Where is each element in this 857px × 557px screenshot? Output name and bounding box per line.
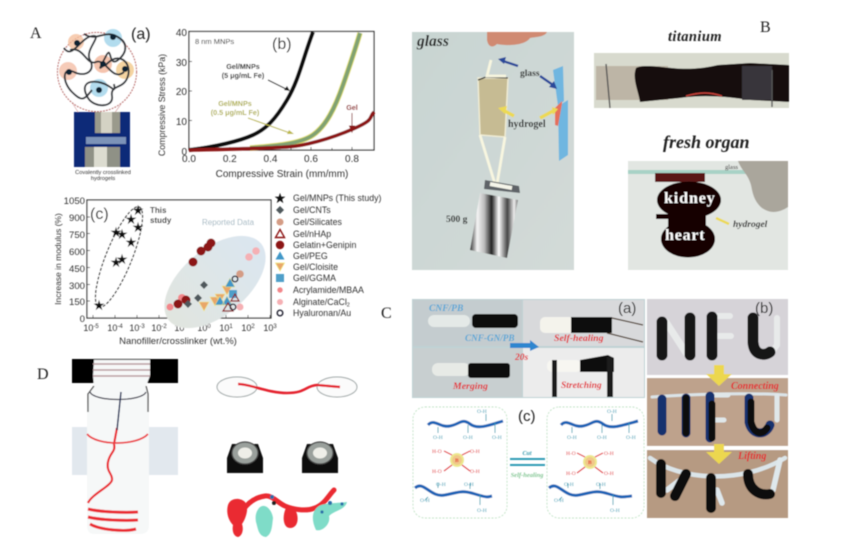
stars: ★ bbox=[110, 254, 122, 270]
arrow bbox=[716, 218, 729, 224]
x axis ticks: 0.4 bbox=[264, 154, 278, 165]
pale backdrop band bbox=[72, 427, 178, 475]
legend labels: Gel/nHAp bbox=[293, 229, 331, 239]
legend labels: Gel/PEG bbox=[293, 251, 328, 261]
legend labels: Gel/CNTs bbox=[293, 205, 331, 215]
annotation: Gel/MNPs 0.5 bbox=[211, 99, 260, 117]
label glass: glass bbox=[416, 33, 449, 50]
annotation: Gel/MNPs 0.5: Gel/MNPs bbox=[218, 99, 252, 108]
right dashed box bbox=[547, 407, 644, 518]
heading titanium: titanium bbox=[668, 29, 722, 45]
x axis ticks: 0.0 bbox=[182, 154, 196, 165]
panel: D printed red and teal shape bbox=[227, 490, 347, 537]
right molecule: O-H bbox=[610, 508, 620, 514]
panel: D vial photo bbox=[72, 359, 178, 534]
zoom lines bbox=[73, 104, 121, 128]
label hydrogel: hydrogel bbox=[733, 220, 768, 230]
legend: chart c bbox=[274, 190, 382, 318]
label 500 g: 500 g bbox=[446, 215, 468, 225]
label D: D bbox=[37, 366, 49, 383]
label Lifting: Lifting bbox=[737, 451, 766, 462]
legend labels: Gel/Silicates bbox=[293, 217, 342, 227]
right molecule: H-O bbox=[566, 471, 576, 477]
x ticks: 3 bbox=[273, 324, 277, 330]
left molecule: H-O bbox=[432, 469, 442, 475]
label glass small: glass bbox=[520, 69, 540, 79]
arrows bbox=[706, 365, 732, 386]
legend labels: Alginate/CaCl bbox=[293, 297, 347, 307]
label CNF/PB: CNF/PB bbox=[429, 304, 463, 314]
blue glass schematic bbox=[553, 66, 568, 161]
stars: ★ bbox=[110, 224, 122, 240]
left molecule: O-H bbox=[477, 409, 487, 415]
legend labels: Gel/Cloisite bbox=[293, 262, 338, 272]
left molecule: O-H bbox=[470, 449, 480, 455]
label (b): (b) bbox=[272, 36, 292, 53]
x ticks: -1 bbox=[184, 324, 190, 330]
right molecule: O-H bbox=[604, 471, 614, 477]
annotation: This study: study bbox=[150, 216, 172, 225]
caption: Covalently crosslinked bbox=[75, 170, 131, 176]
label Cut: Cut bbox=[522, 451, 532, 457]
label Connecting: Connecting bbox=[731, 381, 779, 392]
x ticks: -4 bbox=[117, 324, 123, 330]
stars bbox=[93, 202, 144, 313]
left molecule: O-H bbox=[433, 435, 443, 441]
stars: ★ bbox=[125, 211, 137, 227]
y axis ticks: 20 bbox=[176, 87, 187, 98]
x axis ticks: 0.2 bbox=[223, 154, 237, 165]
arrow bbox=[268, 80, 288, 90]
weight bbox=[470, 180, 520, 258]
stars: ★ bbox=[132, 219, 144, 235]
label B: B bbox=[760, 19, 771, 36]
series: Gel/MNPs 5 bbox=[189, 32, 313, 150]
x axis ticks: 0.6 bbox=[304, 154, 318, 165]
label (b): (b) bbox=[755, 300, 773, 317]
y ticks: 900 bbox=[69, 213, 85, 224]
series: Gel/MNPs 0.5 bbox=[250, 33, 360, 148]
label (a): (a) bbox=[131, 26, 151, 43]
right molecule: H-O bbox=[566, 451, 576, 457]
annotation: Gel: Gel bbox=[346, 103, 358, 112]
right molecule: O-H bbox=[567, 435, 577, 441]
x title: Nanofiller/crosslinker (wt.%) bbox=[119, 336, 237, 347]
label (a): (a) bbox=[618, 300, 636, 317]
y ticks bbox=[64, 196, 85, 325]
legend labels: Gel/MNPs (This study) bbox=[293, 193, 382, 203]
stars: ★ bbox=[116, 251, 128, 267]
label CNF-GN/PB: CNF-GN/PB bbox=[465, 333, 515, 343]
vial bbox=[87, 360, 150, 534]
label Stretching: Stretching bbox=[561, 381, 602, 391]
photo: hydrogel under compression bbox=[74, 112, 130, 167]
x ticks bbox=[83, 323, 277, 333]
label (c): (c) bbox=[518, 408, 536, 425]
annotation: Gel/MNPs 0.5: (0.5 μg/mL Fe) bbox=[211, 108, 260, 117]
reported data ellipse bbox=[148, 218, 282, 346]
photo: fresh organ bbox=[628, 161, 788, 270]
x ticks: 2 bbox=[251, 324, 255, 330]
x ticks: 10 bbox=[174, 323, 184, 333]
panel: A mechanical data bbox=[30, 25, 151, 182]
y axis ticks: 30 bbox=[176, 58, 187, 69]
label kidney: kidney bbox=[664, 190, 716, 207]
x axis ticks: 0.8 bbox=[345, 154, 359, 165]
y axis ticks bbox=[176, 28, 187, 158]
heading fresh organ: fresh organ bbox=[663, 132, 750, 152]
hydrogel thread bbox=[88, 428, 117, 503]
NFU top bbox=[662, 316, 777, 356]
y axis ticks: 10 bbox=[176, 117, 187, 128]
label Merging: Merging bbox=[452, 381, 488, 392]
stars: ★ bbox=[93, 297, 105, 313]
label hydrogel: hydrogel bbox=[508, 119, 546, 130]
x ticks: -5 bbox=[93, 324, 99, 330]
right molecule: O-H bbox=[604, 451, 614, 457]
left molecule: O-H bbox=[464, 482, 474, 488]
chart: modulus vs filler (c) bbox=[53, 196, 282, 347]
glass plate with hydrogel bbox=[478, 78, 508, 137]
right molecule: O-H bbox=[626, 435, 636, 441]
x axis ticks bbox=[182, 154, 359, 165]
right molecule: O-H bbox=[596, 482, 606, 488]
y ticks: 300 bbox=[69, 281, 85, 292]
left molecule: O-H bbox=[436, 482, 446, 488]
label heart: heart bbox=[665, 227, 705, 244]
label (c): (c) bbox=[90, 206, 109, 223]
panel: C(b) NFU letters bbox=[647, 299, 788, 518]
left molecule: H-O bbox=[432, 449, 442, 455]
annotation: Gel/MNPs 5: (5 μg/mL Fe) bbox=[222, 71, 265, 80]
label Self-healing: Self-healing bbox=[511, 472, 544, 479]
vial bases bbox=[227, 442, 338, 473]
panel: C(a) self healing photos bbox=[412, 299, 645, 398]
label Self-healing: Self-healing bbox=[554, 333, 604, 344]
legend symbols: ★ bbox=[274, 190, 286, 206]
label C: C bbox=[381, 305, 392, 322]
right molecule: B bbox=[588, 460, 592, 466]
legend labels: Hyaluronan/Au bbox=[293, 308, 351, 318]
y ticks: 1050 bbox=[64, 196, 85, 207]
y ticks: 600 bbox=[69, 247, 85, 258]
arrow bbox=[350, 113, 354, 132]
arrow bbox=[248, 118, 290, 133]
annotation: Gel/MNPs 5: Gel/MNPs bbox=[226, 62, 260, 71]
y ticks: 150 bbox=[69, 297, 85, 308]
x ticks: 10 bbox=[151, 323, 161, 333]
NFU middle bbox=[652, 394, 786, 438]
x ticks: 10 bbox=[129, 323, 139, 333]
panel letter A: A bbox=[30, 25, 42, 42]
legend labels bbox=[293, 193, 382, 318]
y ticks: 0 bbox=[80, 314, 85, 325]
strings bbox=[480, 60, 506, 184]
icon: crosslinked network circle bbox=[58, 29, 136, 112]
panel: C(c) borate bonding schematic bbox=[413, 407, 644, 518]
stars: ★ bbox=[125, 234, 137, 250]
left molecule: O-H bbox=[477, 508, 487, 514]
NFU bottom bbox=[650, 458, 785, 508]
x ticks: 0 bbox=[207, 324, 211, 330]
y axis ticks: 40 bbox=[176, 28, 187, 39]
x ticks: 10 bbox=[263, 323, 273, 333]
stars: ★ bbox=[132, 202, 144, 218]
stars: ★ bbox=[116, 226, 128, 242]
annotation: This study: This bbox=[150, 206, 167, 215]
panel: D fibre between vials bbox=[217, 377, 357, 473]
right molecule: O-H bbox=[607, 409, 617, 415]
kidney and heart silhouette bbox=[656, 182, 721, 258]
left molecule bbox=[415, 409, 503, 514]
data points bbox=[166, 238, 260, 311]
panel: A mechanical data: hydrogels bbox=[91, 176, 115, 182]
x ticks: 10 bbox=[197, 323, 207, 333]
annotation: This study bbox=[150, 206, 172, 225]
x ticks: 10 bbox=[241, 323, 251, 333]
x ticks: 10 bbox=[107, 323, 117, 333]
hand bbox=[487, 32, 547, 47]
left molecule: O-H bbox=[420, 498, 430, 504]
arrow 20s bbox=[510, 340, 539, 351]
label glass tiny: glass bbox=[725, 164, 738, 171]
chart: compressive stress vs strain (b) bbox=[157, 28, 374, 180]
series: Gel bbox=[189, 112, 374, 150]
y axis ticks: 0 bbox=[181, 147, 187, 158]
legend labels: 2 bbox=[347, 302, 350, 308]
right molecule bbox=[549, 409, 638, 514]
x ticks: 1 bbox=[229, 324, 233, 330]
x ticks: 10 bbox=[219, 323, 229, 333]
legend labels: Gel/GGMA bbox=[293, 273, 336, 283]
left molecule: O-H bbox=[492, 435, 502, 441]
y ticks: 450 bbox=[69, 264, 85, 275]
y ticks: 750 bbox=[69, 230, 85, 241]
annotation: 8 nm MNPs: 8 nm MNPs bbox=[195, 37, 234, 46]
equilibrium arrows bbox=[510, 459, 545, 465]
left dashed box bbox=[413, 407, 507, 518]
this study ellipse bbox=[87, 202, 151, 312]
right molecule: O-H bbox=[564, 482, 574, 488]
annotation: Reported Data: Reported Data bbox=[202, 218, 255, 227]
x ticks: -3 bbox=[139, 324, 145, 330]
right molecule: O-H bbox=[554, 498, 564, 504]
label 20s: 20s bbox=[514, 353, 528, 363]
right molecule: O-H bbox=[597, 435, 607, 441]
annotation: Gel/MNPs 5 bbox=[222, 62, 265, 80]
photo: titanium bbox=[594, 53, 789, 108]
left molecule: O-H bbox=[463, 435, 473, 441]
x ticks: 10 bbox=[83, 323, 93, 333]
panel: B glass adhesion photo bbox=[412, 32, 574, 270]
arrows bbox=[503, 61, 553, 85]
left molecule: O-H bbox=[470, 469, 480, 475]
y axis title: Compressive Stress (kPa) bbox=[157, 54, 167, 156]
left molecule: B bbox=[455, 458, 459, 464]
y title: Increase in modulus (%) bbox=[53, 213, 63, 305]
x ticks: -2 bbox=[161, 324, 167, 330]
legend labels: Acrylamide/MBAA bbox=[293, 285, 364, 295]
x axis title: Compressive Strain (mm/mm) bbox=[216, 169, 348, 180]
legend labels: Gelatin+Genipin bbox=[293, 240, 356, 250]
